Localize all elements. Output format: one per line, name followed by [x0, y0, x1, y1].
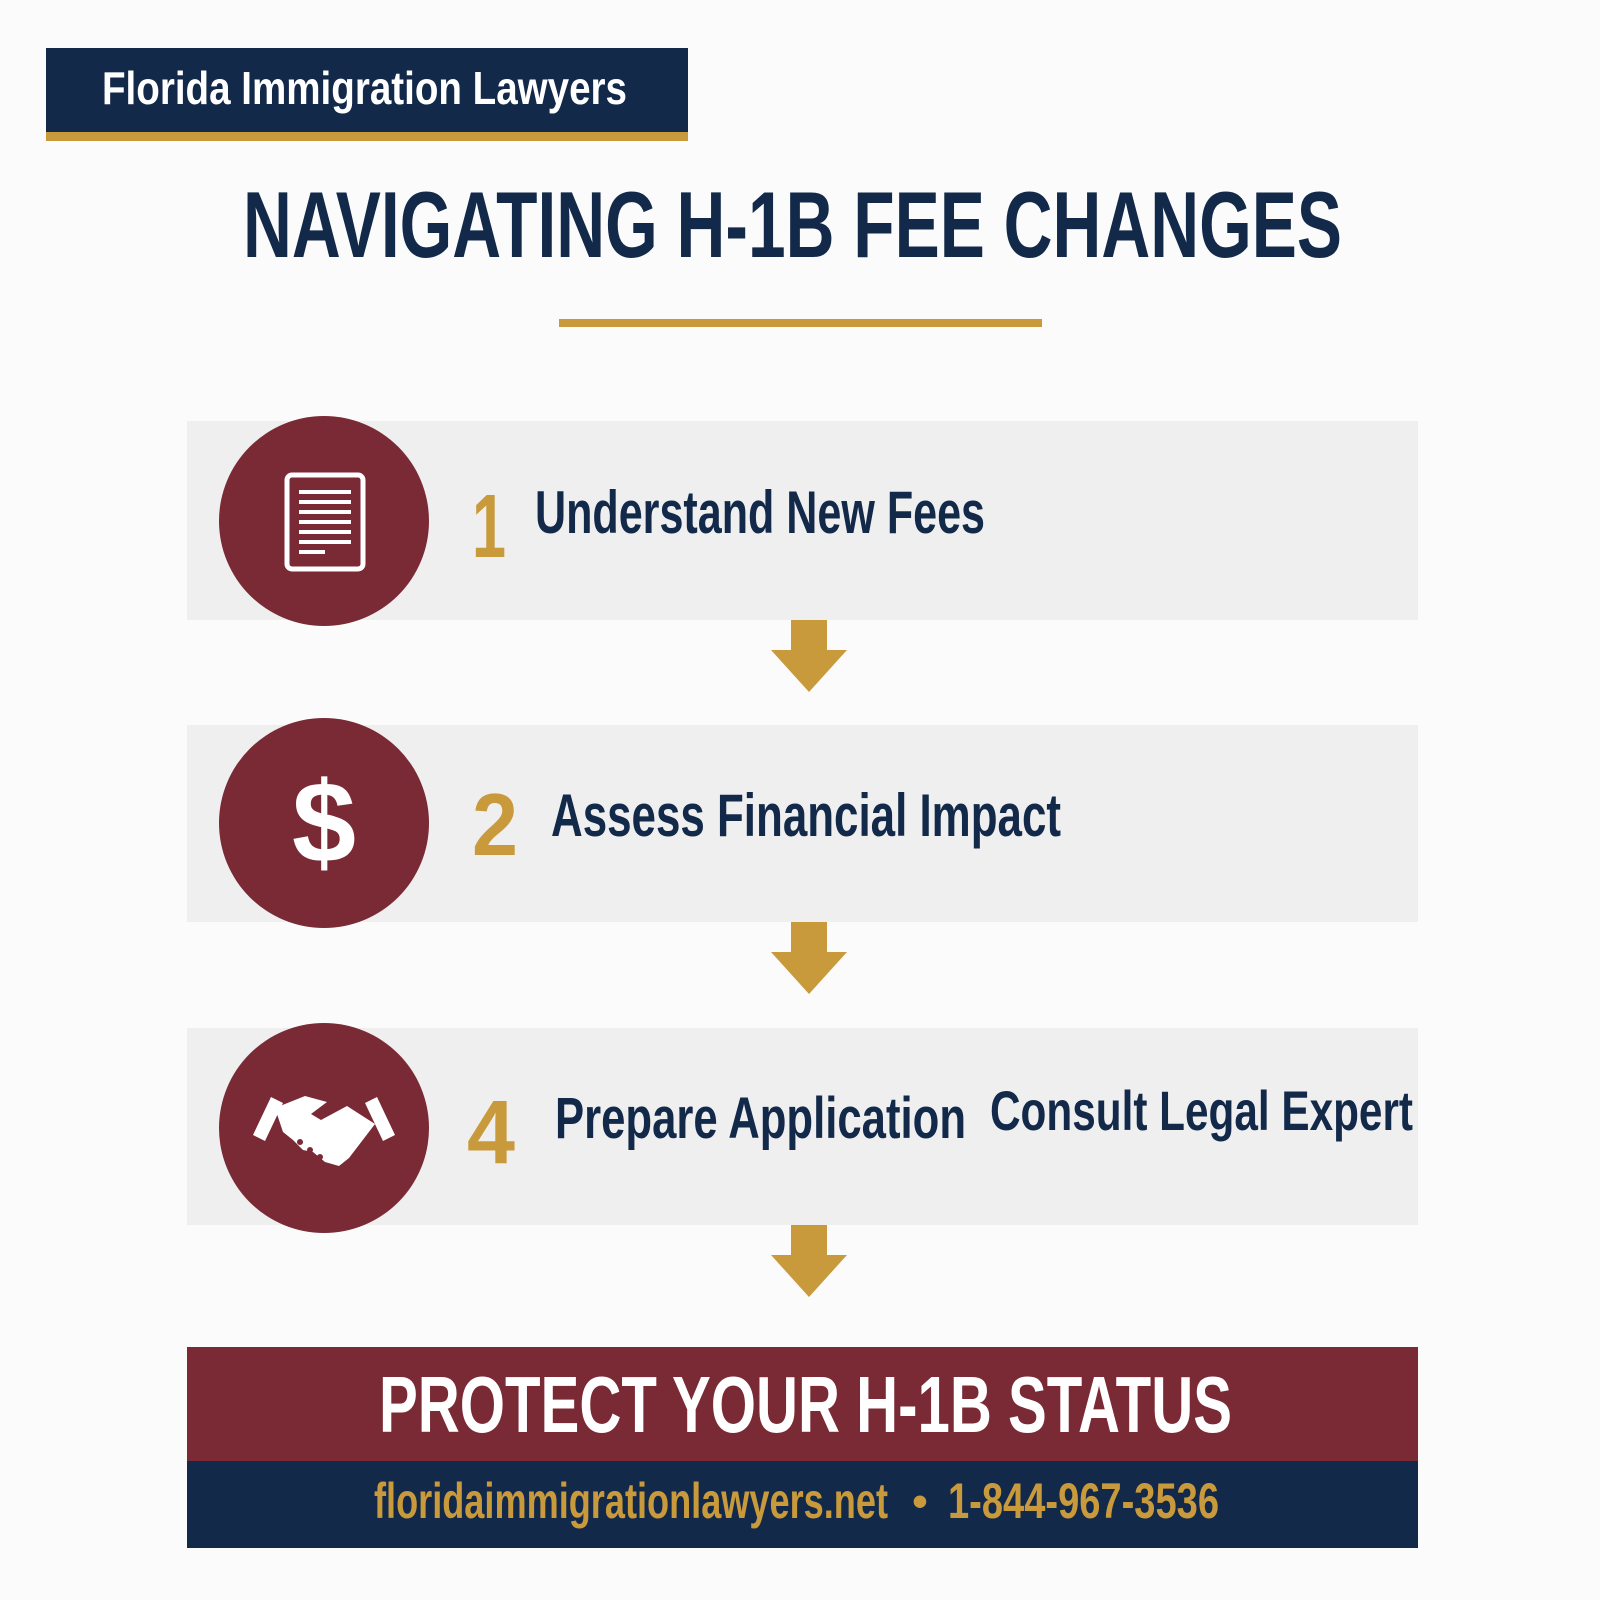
panel: step 1: Understand New Fees [535, 479, 985, 546]
panel: step 1 [187, 416, 1418, 626]
header badge: Florida Immigration Lawyers [102, 62, 627, 114]
panel: step 4: 4 [467, 1083, 515, 1183]
arrow 2 [771, 922, 847, 994]
panel: step 4: Prepare Application [555, 1086, 966, 1151]
header badge [46, 48, 688, 141]
title underline [559, 319, 1042, 327]
panel: step 2: 2 [472, 775, 518, 874]
panel: step 2: Assess Financial Impact [551, 782, 1061, 849]
panel: step 4 [187, 1023, 1418, 1233]
icon: dollar: $ [292, 759, 356, 887]
icon: dollar [219, 718, 429, 928]
panel: step 2 [187, 718, 1418, 928]
arrow 3 [771, 1225, 847, 1297]
call to action banner: PROTECT YOUR H-1B STATUS [379, 1360, 1232, 1449]
call to action banner [187, 1347, 1418, 1548]
panel: step 4: Consult Legal Expert [990, 1079, 1413, 1142]
call to action banner: 1-844-967-3536 [948, 1473, 1219, 1529]
call to action banner: floridaimmigrationlawyers.net [374, 1473, 888, 1529]
panel: step 1: 1 [472, 477, 506, 577]
icon: document [219, 416, 429, 626]
arrow 1 [771, 620, 847, 692]
icon: handshake [219, 1023, 429, 1233]
call to action banner: • [912, 1477, 928, 1526]
